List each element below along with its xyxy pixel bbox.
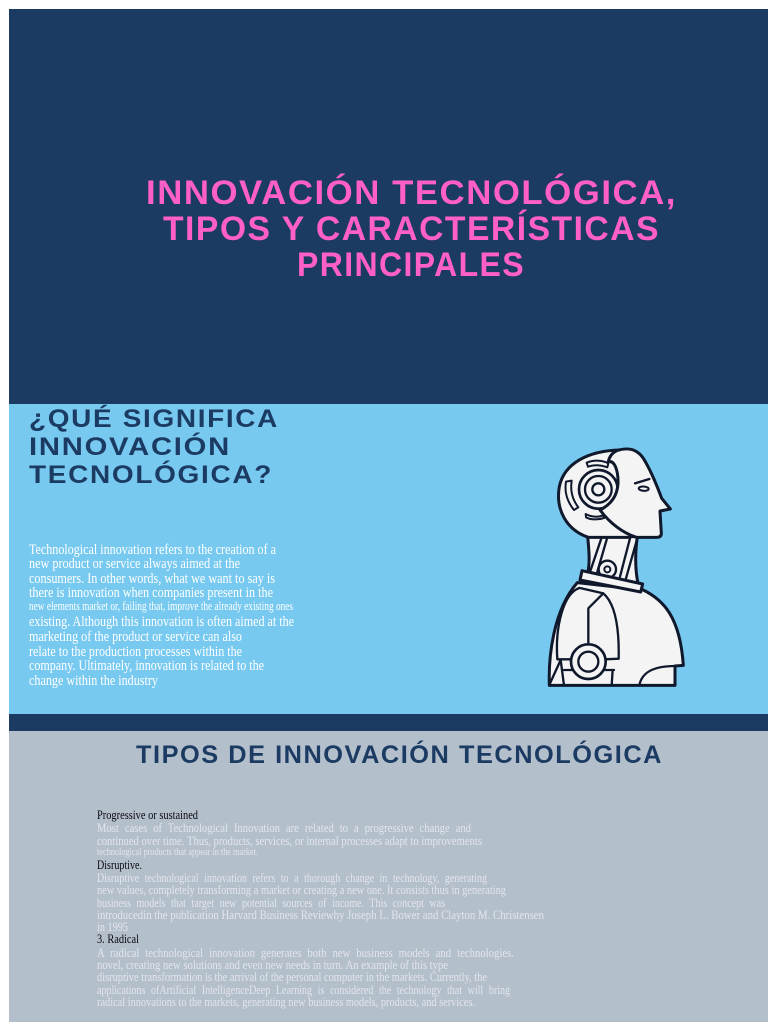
- divider band: [9, 714, 768, 731]
- robot body: [549, 583, 683, 685]
- text block: definition: [29, 542, 294, 689]
- text block: definition: change within the industry: [29, 673, 158, 689]
- icon: robot profile: [549, 449, 683, 685]
- type 3: radical: disruptive transformation is the arrival of the personal computer in the markets. Currently, the: [97, 969, 487, 984]
- type 2: disruptive: new values, completely transforming a market or creating a new one. It consists thus in generating: [97, 882, 506, 897]
- panel: types background: [9, 731, 768, 1022]
- type 3: radical: 3. Radical: [97, 931, 139, 946]
- type 3: radical: radical innovations to the markets, generating new business models, products, and services.: [97, 994, 475, 1009]
- title: INNOVACIÓN TECNOLÓGICA,: [146, 174, 677, 212]
- type 2: disruptive: introducedin the publication Harvard Business Reviewby Joseph L. Bower and Clayton M. Christensen: [97, 907, 544, 922]
- robot ear rings: [566, 461, 608, 519]
- title: TIPOS Y CARACTERÍSTICAS: [163, 210, 660, 248]
- heading: what is technological innovation: INNOVACIÓN: [29, 431, 231, 461]
- text block: definition: consumers. In other words, what we want to say is: [29, 571, 275, 587]
- type 2: disruptive: Disruptive technological innovation refers to a thorough change in technology, generating: [97, 870, 487, 885]
- robot head back: [559, 450, 630, 537]
- type 1: progressive: Most cases of Technological Innovation are related to a progressive change and: [97, 820, 471, 835]
- type 2: disruptive: in 1995: [97, 919, 128, 934]
- robot collar: [580, 571, 643, 592]
- type 3: radical: [97, 931, 514, 1009]
- text block: definition: Technological innovation refers to the creation of a: [29, 542, 276, 558]
- text block: definition: company. Ultimately, innovation is related to the: [29, 658, 264, 674]
- text block: definition: existing. Although this innovation is often aimed at the: [29, 614, 294, 630]
- type 3: radical: A radical technological innovation generates both new business models and technologies.: [97, 945, 514, 960]
- type 2: disruptive: business models that target new potential sources of income. This concept was: [97, 895, 445, 910]
- type 2: disruptive: [97, 857, 544, 934]
- type 1: progressive: technological products that appear in the market.: [97, 846, 258, 858]
- robot face: [600, 449, 670, 537]
- text block: types: [97, 807, 544, 1009]
- text block: definition: relate to the production processes within the: [29, 644, 242, 660]
- heading: types of technological innovation: TIPOS DE INNOVACIÓN TECNOLÓGICA: [136, 739, 663, 769]
- text block: definition: new elements market or, failing that, improve the already existing ones: [29, 598, 293, 613]
- title: PRINCIPALES: [297, 246, 525, 284]
- panel: title background: [9, 9, 768, 404]
- type 1: progressive: continued over time. Thus, products, services, or internal processes adapt to improvements: [97, 833, 482, 848]
- type 2: disruptive: Disruptive.: [97, 857, 142, 872]
- text block: definition: marketing of the product or service can also: [29, 629, 242, 645]
- heading: what is technological innovation: [29, 404, 279, 489]
- text block: definition: there is innovation when companies present in the: [29, 585, 273, 601]
- title: [146, 174, 677, 284]
- type 1: progressive: [97, 807, 482, 858]
- heading: what is technological innovation: ¿QUÉ SIGNIFICA: [29, 404, 279, 433]
- heading: what is technological innovation: TECNOLÓGICA?: [29, 459, 273, 489]
- text block: definition: new product or service always aimed at the: [29, 556, 240, 572]
- type 3: radical: novel, creating new solutions and even new needs in turn. An example of this type: [97, 957, 448, 972]
- robot neck: [588, 537, 638, 585]
- panel: definition background: [9, 404, 768, 714]
- type 1: progressive: Progressive or sustained: [97, 807, 198, 822]
- type 3: radical: applications ofArtificial IntelligenceDeep Learning is considered the technology that will bring: [97, 982, 510, 997]
